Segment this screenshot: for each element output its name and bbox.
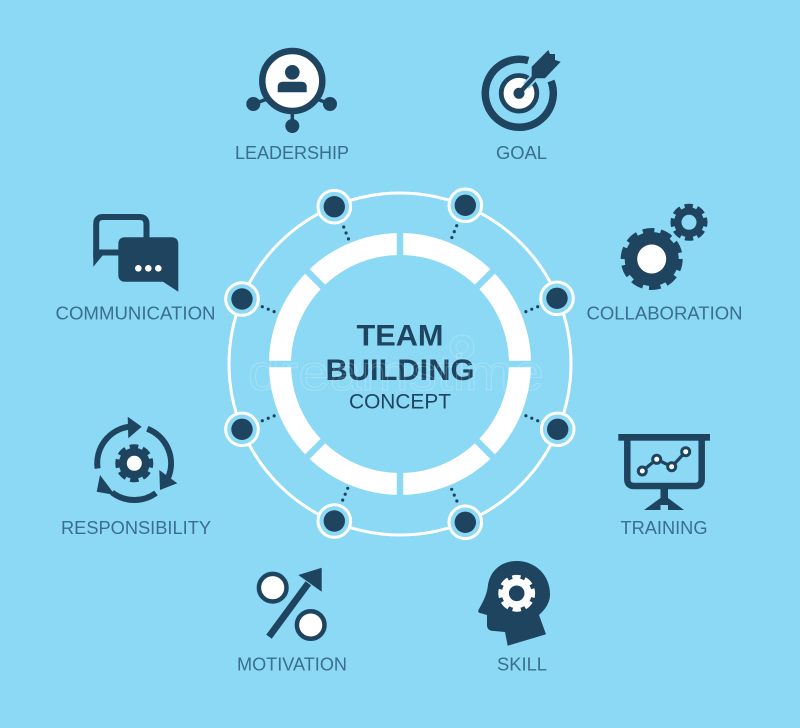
- label: collaboration: COLLABORATION: [586, 303, 742, 323]
- item: goal: [485, 50, 561, 163]
- ring nodes: [226, 189, 574, 539]
- icon: percent arrow: [259, 568, 325, 639]
- icon: cycle arrows with gear: [97, 417, 177, 500]
- label: leadership: LEADERSHIP: [235, 143, 349, 163]
- item: skill: [478, 561, 550, 674]
- icon: presentation board: [618, 434, 710, 510]
- central title: CONCEPT: [349, 391, 451, 414]
- outer ring: [229, 193, 571, 535]
- label: responsibility: RESPONSIBILITY: [61, 518, 211, 538]
- central title: BUILDING: [326, 354, 474, 387]
- item: motivation: [237, 568, 347, 674]
- item: responsibility: [61, 417, 211, 538]
- icon: head with gear: [478, 561, 550, 646]
- label: skill: SKILL: [497, 654, 547, 674]
- icon: leadership: [246, 51, 337, 133]
- central diagram: [226, 189, 574, 539]
- central title: TEAM: [356, 320, 444, 353]
- label: goal: GOAL: [496, 143, 547, 163]
- dotted connectors: [262, 226, 538, 502]
- segmented inner ring: [264, 228, 536, 500]
- central title: [326, 320, 474, 414]
- icon: goal target: [485, 50, 561, 127]
- faint stock watermark: dreamstime: [248, 345, 544, 401]
- item: leadership: [235, 51, 349, 163]
- item: training: [618, 434, 710, 538]
- item: collaboration: [586, 206, 742, 323]
- label: motivation: MOTIVATION: [237, 654, 347, 674]
- label: communication: COMMUNICATION: [56, 303, 216, 323]
- icon: gears: [623, 206, 706, 288]
- item: communication: [56, 217, 216, 323]
- icon: speech bubbles: [93, 217, 178, 292]
- label: training: TRAINING: [620, 518, 708, 538]
